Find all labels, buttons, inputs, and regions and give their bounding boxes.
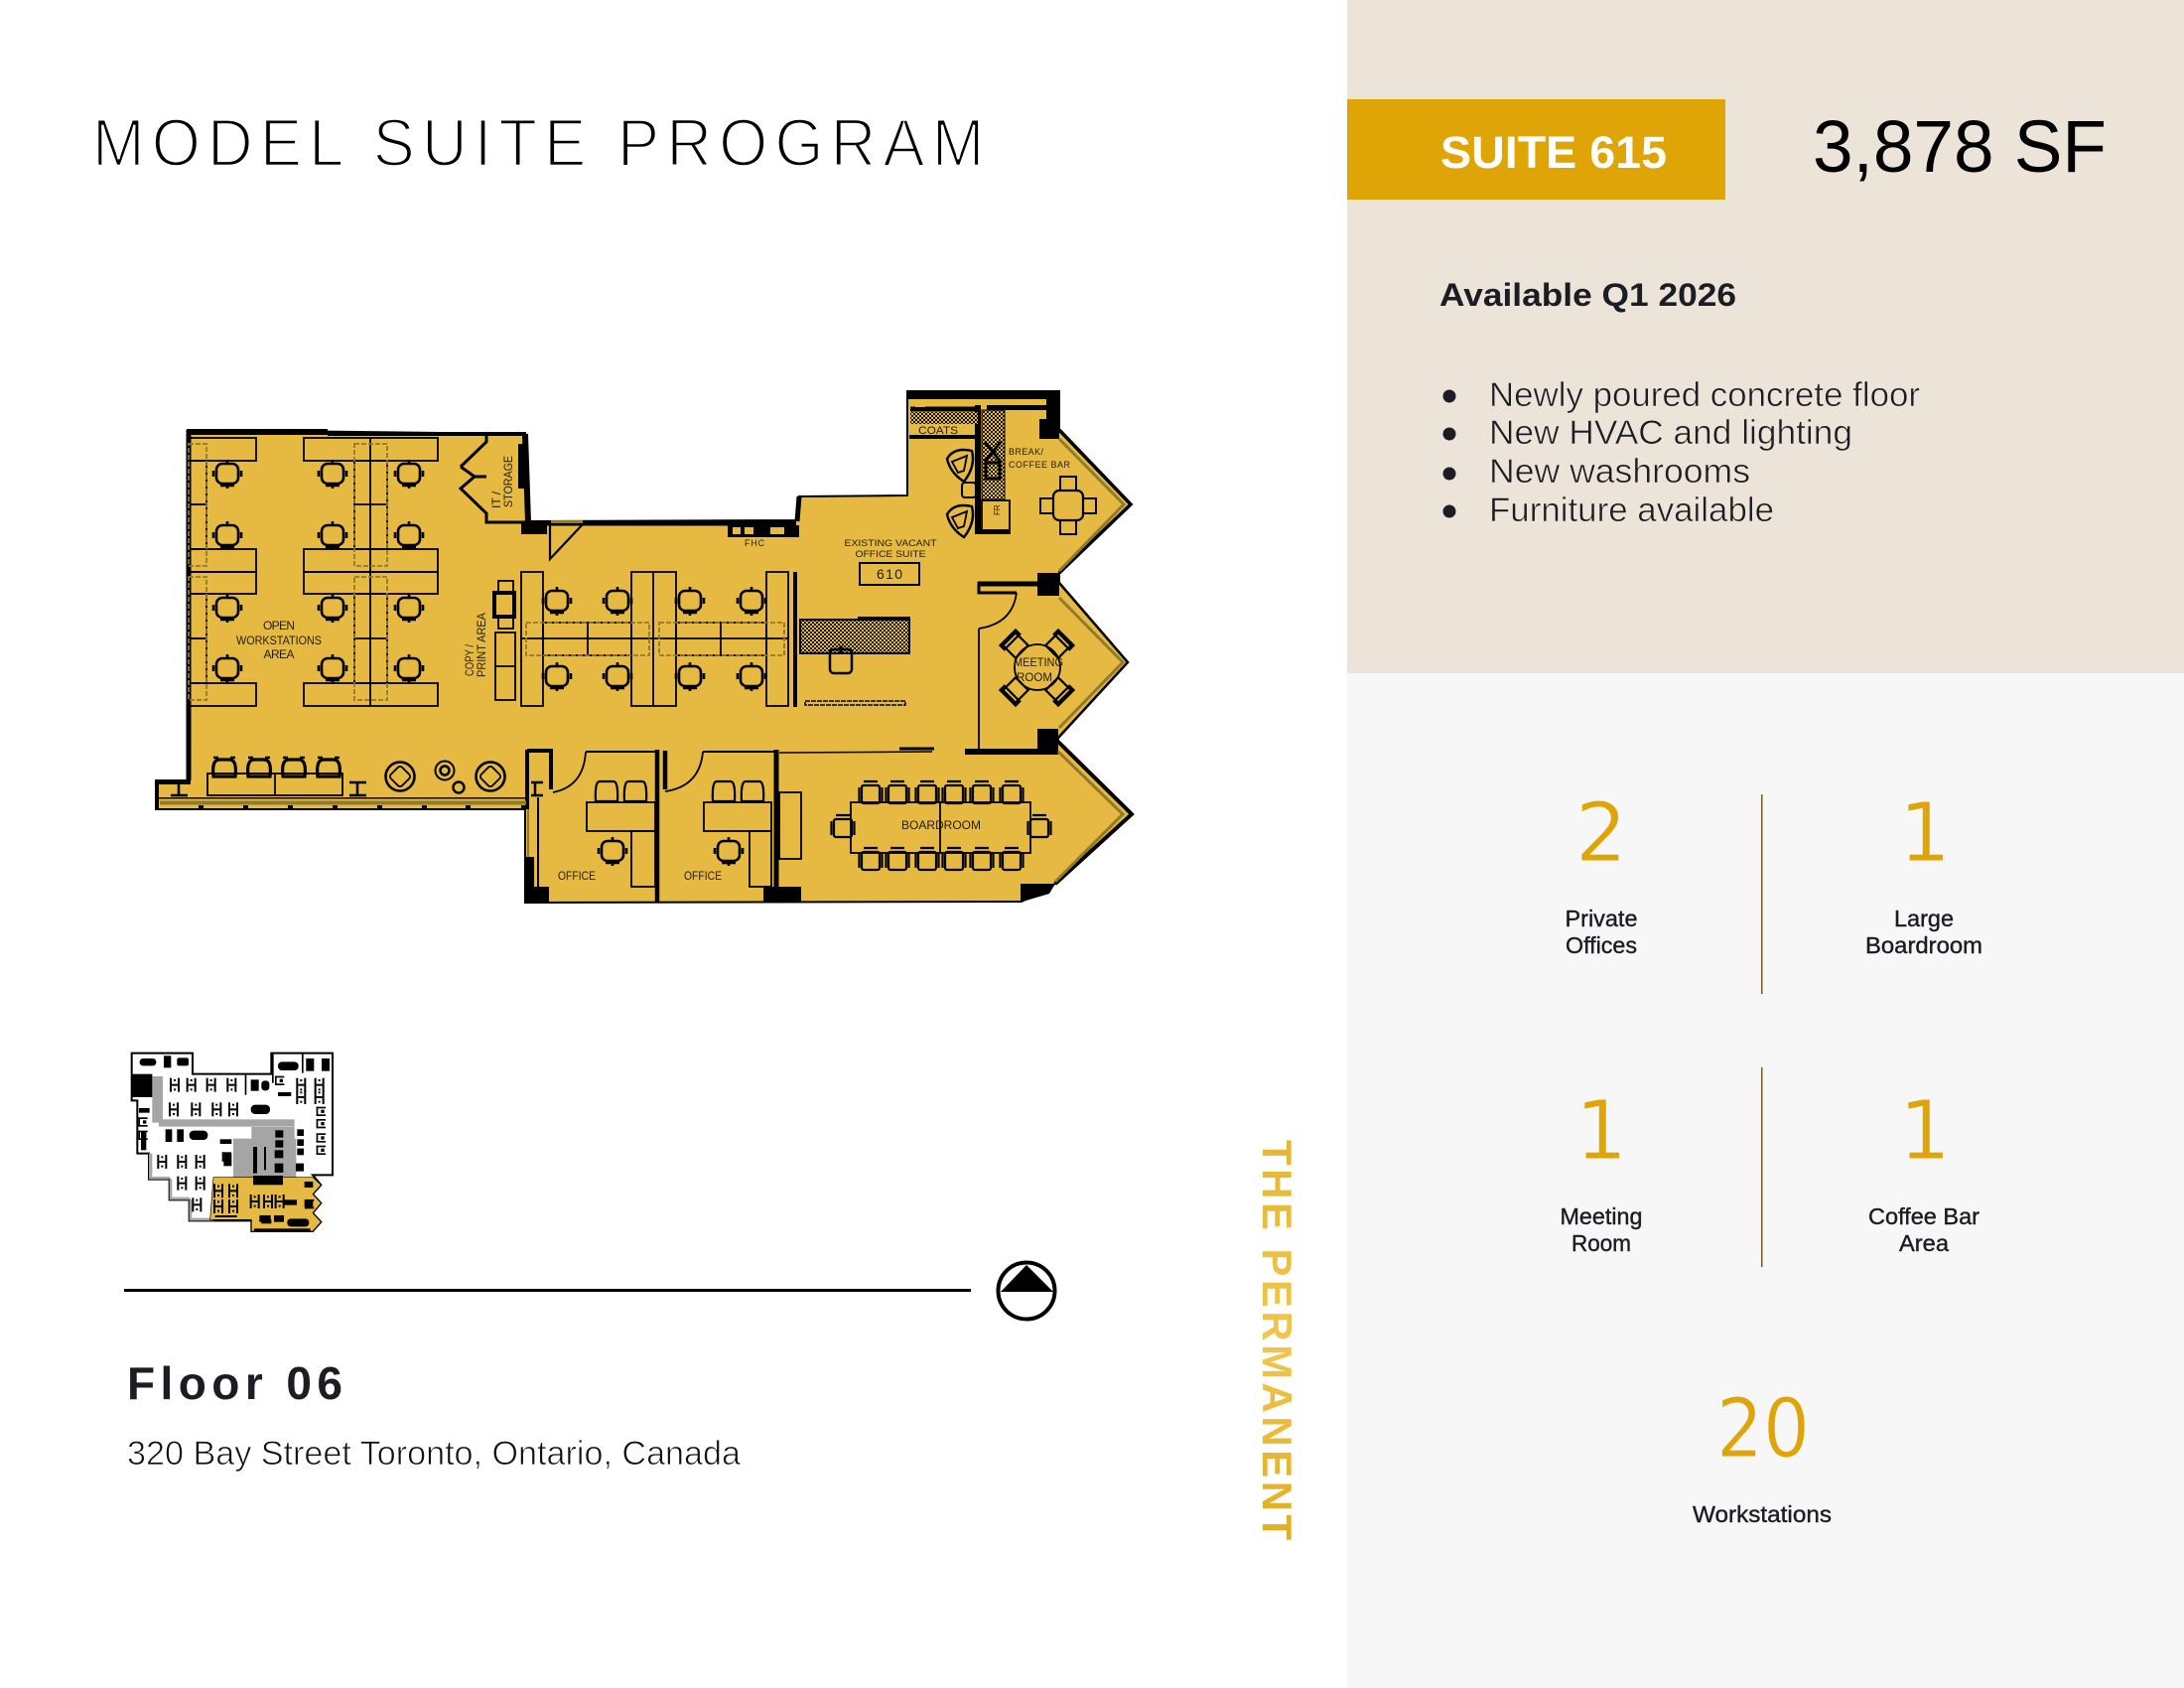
plan room labels: COATS xyxy=(918,425,958,437)
plan room labels: MEETING xyxy=(1014,655,1063,669)
stat: large boardroom: Boardroom xyxy=(1865,932,1982,958)
plan room labels: EXISTING VACANT xyxy=(844,538,937,549)
plan room labels: ROOM xyxy=(1017,670,1052,684)
feature list: New HVAC and lighting xyxy=(1489,414,1852,452)
stat: meeting room xyxy=(1561,1084,1642,1256)
open workstations group xyxy=(189,438,438,706)
plan room labels: OFFICE xyxy=(558,869,596,883)
divider line xyxy=(124,1289,971,1292)
stat: meeting room: 1 xyxy=(1575,1084,1627,1179)
feature list: Furniture available xyxy=(1489,492,1774,529)
plan room labels: FR xyxy=(993,504,1002,515)
lounge armchairs and plant xyxy=(385,761,504,792)
suite number box xyxy=(860,563,919,585)
address: 320 Bay Street Toronto, Ontario, Canada xyxy=(127,1435,741,1473)
stat: coffee bar area: Coffee Bar xyxy=(1868,1203,1979,1229)
vertical brand text: THE PERMANENT xyxy=(1254,1140,1300,1540)
stat: coffee bar area xyxy=(1868,1084,1979,1256)
stat: private offices: 2 xyxy=(1575,786,1627,881)
feature list: New washrooms xyxy=(1489,453,1750,491)
exterior and interior walls xyxy=(156,405,1132,902)
suite floor area xyxy=(156,391,1132,903)
meeting room table xyxy=(1000,630,1074,706)
title: MODEL SUITE PROGRAM xyxy=(92,105,984,180)
stat: private offices: Private xyxy=(1565,906,1638,931)
plan room labels xyxy=(236,425,1070,883)
window sill xyxy=(156,797,526,810)
plan room labels: WORKSTATIONS xyxy=(236,633,322,647)
plan room labels: COFFEE BAR xyxy=(1009,460,1070,470)
stat: meeting room: Meeting xyxy=(1561,1203,1642,1229)
gray core and corridors xyxy=(149,1076,296,1220)
stat: large boardroom: 1 xyxy=(1899,786,1951,881)
stat: large boardroom xyxy=(1865,786,1982,958)
lounge bench with chairs xyxy=(171,758,543,795)
stat: private offices: Offices xyxy=(1566,932,1637,958)
plan room labels: IT / xyxy=(489,491,503,508)
centre workstations group xyxy=(521,572,797,707)
copy and print equipment xyxy=(494,581,515,700)
stat: meeting room: Room xyxy=(1571,1230,1631,1256)
panel: beige suite information background xyxy=(1347,0,2184,673)
mini map furniture and rooms xyxy=(132,1054,330,1231)
plan room labels: FHC xyxy=(745,538,764,548)
suite badge: SUITE 615 xyxy=(1440,127,1667,178)
plan room labels: OFFICE xyxy=(684,869,722,883)
stat: workstations: Workstations xyxy=(1693,1501,1832,1527)
stat: private offices xyxy=(1565,786,1638,958)
building outline xyxy=(132,1054,333,1231)
stat: workstations: 20 xyxy=(1716,1382,1810,1477)
plan room labels: STORAGE xyxy=(501,456,515,507)
floor heading: Floor 06 xyxy=(127,1357,342,1409)
structural columns and wall blocks xyxy=(518,391,1059,903)
office one furniture xyxy=(587,781,655,887)
floor plan xyxy=(156,391,1132,903)
plan room labels: COPY / xyxy=(463,643,477,676)
coffee bar seating and counter xyxy=(910,410,1096,537)
suite highlighted in gold xyxy=(210,1178,321,1231)
stat: coffee bar area: Area xyxy=(1899,1230,1949,1256)
stat: large boardroom: Large xyxy=(1894,906,1954,931)
plan room labels: AREA xyxy=(264,647,294,661)
plan room labels: OPEN xyxy=(263,619,295,633)
suite area: 3,878 SF xyxy=(1813,105,2107,188)
plan room labels: BREAK/ xyxy=(1009,447,1043,457)
stat dividers xyxy=(1761,794,1763,1267)
detail openings in walls xyxy=(733,400,1046,534)
panel: light gray statistics background xyxy=(1347,673,2184,1688)
availability heading: Available Q1 2026 xyxy=(1439,277,1736,313)
plan room labels: 610 xyxy=(877,566,902,582)
plan room labels: BOARDROOM xyxy=(901,818,981,832)
feature list: Newly poured concrete floor xyxy=(1489,376,1920,414)
stat: coffee bar area: 1 xyxy=(1899,1084,1951,1179)
boardroom table with chairs xyxy=(832,781,1050,870)
reception desk xyxy=(800,618,909,705)
key plan mini map xyxy=(132,1054,333,1231)
glazing lines xyxy=(160,439,1124,882)
plan room labels: OFFICE SUITE xyxy=(856,549,925,560)
stat: workstations xyxy=(1693,1382,1832,1527)
office two furniture xyxy=(704,781,801,887)
icon: north compass xyxy=(999,1263,1054,1319)
suite badge xyxy=(1347,99,1725,200)
feature list xyxy=(1443,376,1920,529)
plan room labels: PRINT AREA xyxy=(475,613,488,677)
